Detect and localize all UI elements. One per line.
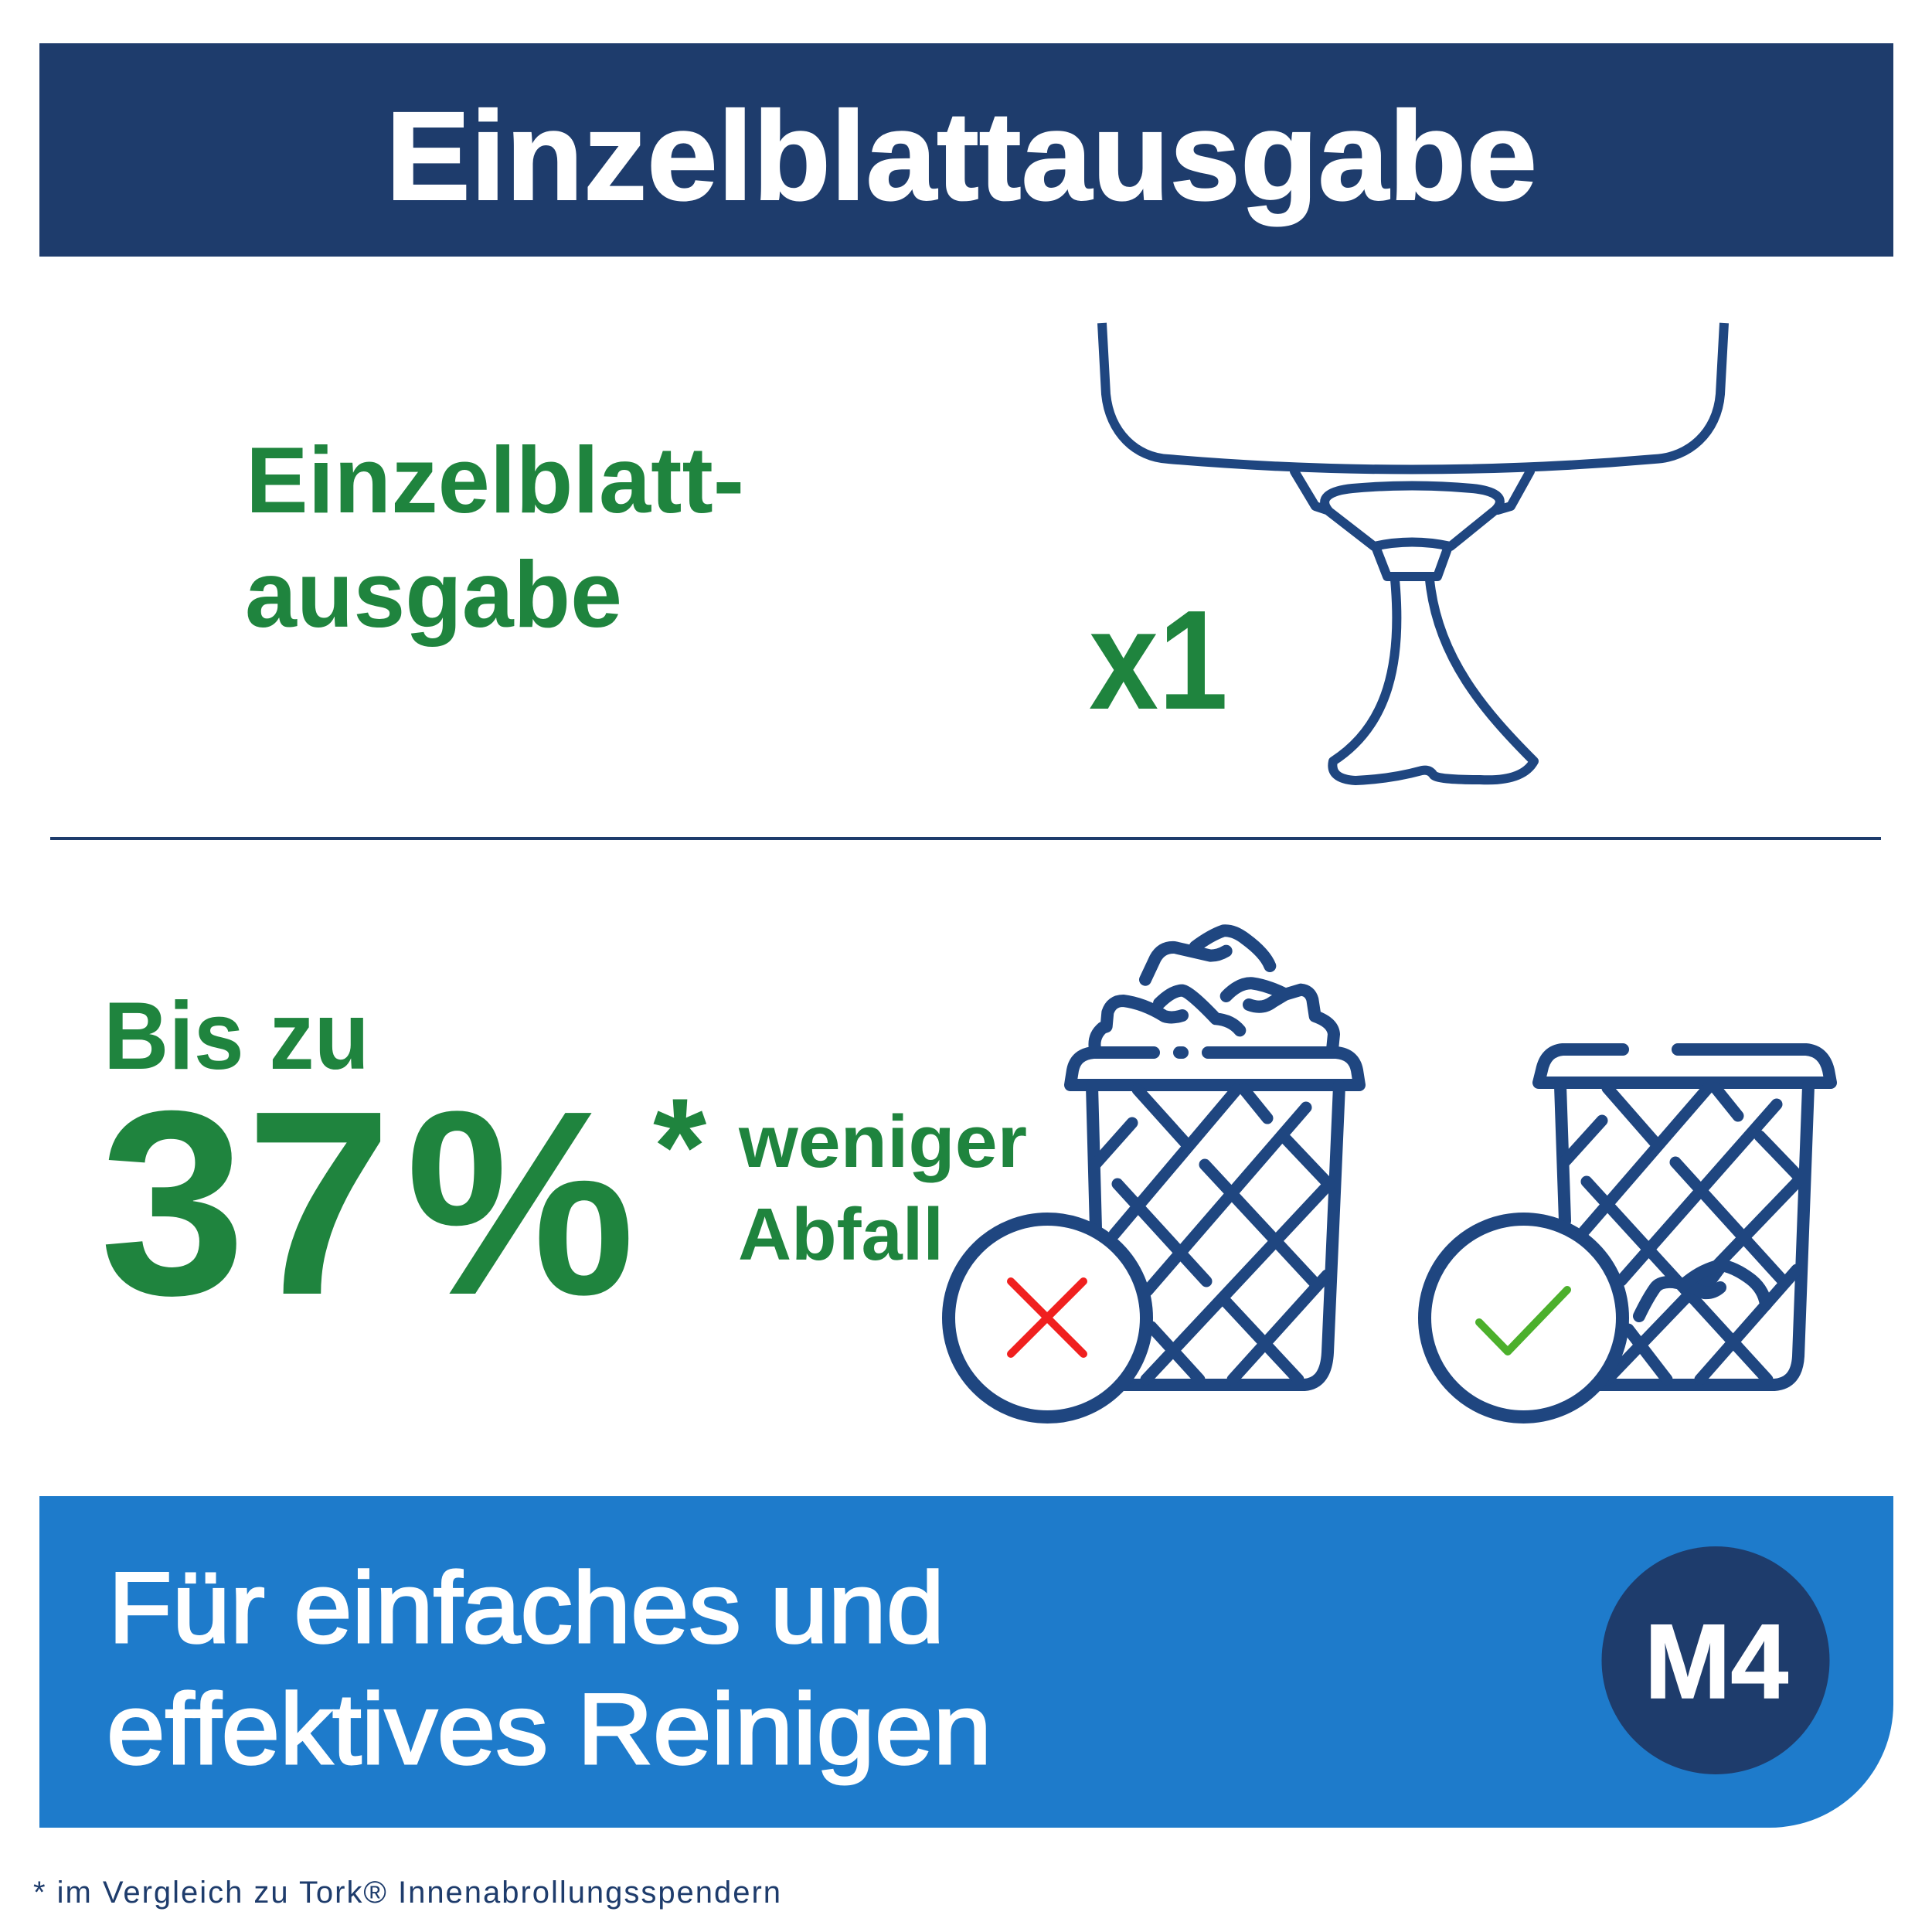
icon: dispenser with single sheet [1102, 323, 1724, 781]
heading: single sheet dispensing: ausgabe [245, 542, 622, 647]
title: Einzelblattausgabe [386, 85, 1537, 226]
multiplier x1: x1 [1089, 580, 1228, 739]
text: up to: Bis zu [104, 983, 369, 1090]
stat: 37 percent: 37 [100, 1056, 392, 1350]
benefit text: effektives Reinigen [107, 1672, 992, 1785]
stat: 37 percent [100, 1056, 635, 1350]
asterisk: * [653, 1070, 707, 1223]
badge: green check [1425, 1219, 1623, 1417]
text: less waste: weniger [738, 1100, 1027, 1183]
text: less waste: Abfall [738, 1193, 944, 1276]
icon: overflowing waste bin with cross [949, 930, 1359, 1417]
header band [39, 43, 1893, 257]
divider [50, 837, 1881, 840]
icon: waste bin with little paper and check [1425, 1049, 1831, 1417]
heading: single sheet dispensing [245, 427, 744, 647]
badge: M4 size [1601, 1546, 1830, 1774]
benefit text: Für einfaches und [108, 1551, 944, 1664]
badge: red cross [949, 1219, 1147, 1417]
panel: benefit band [39, 1496, 1893, 1828]
benefit text [107, 1551, 992, 1785]
badge: M4 size: M4 [1645, 1603, 1788, 1721]
text: less waste [738, 1100, 1027, 1276]
footnote: * im Vergleich zu Tork® Innenabrollungsspendern [33, 1876, 781, 1910]
stat: 37 percent: % [406, 1056, 635, 1350]
heading: single sheet dispensing: Einzelblatt- [246, 427, 744, 532]
